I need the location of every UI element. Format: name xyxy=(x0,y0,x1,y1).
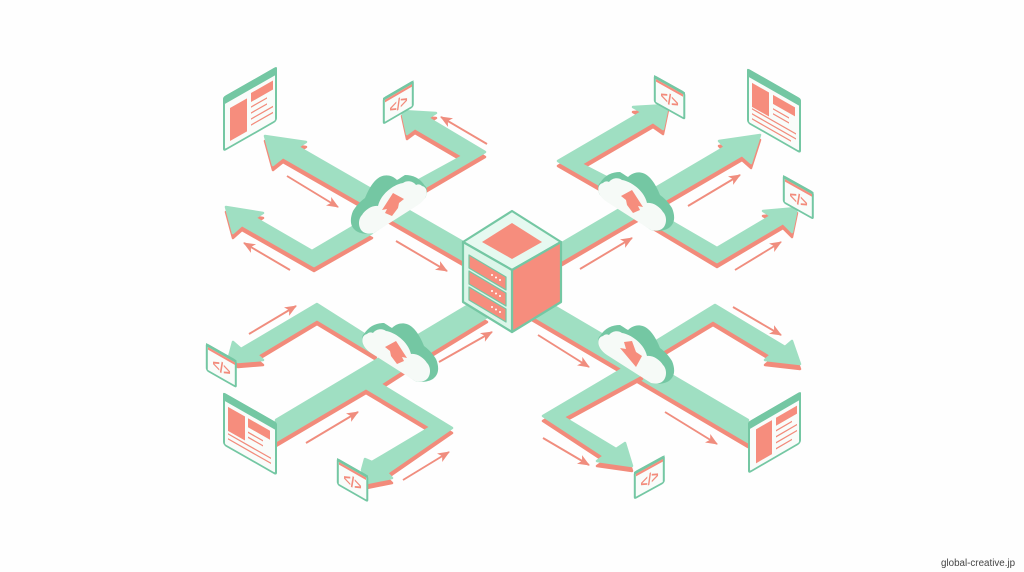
server left face with drive bays xyxy=(463,242,512,332)
web page window: top-right large xyxy=(747,68,801,153)
arrow: top-right to upper code window xyxy=(558,105,668,197)
code window: bottom-centre-left: </> xyxy=(343,469,362,497)
code window: top-right upper: </> xyxy=(660,86,679,114)
code window: top-right upper xyxy=(654,75,685,119)
cloud: top-left with up arrow xyxy=(351,175,427,234)
code window: top-right lower: </> xyxy=(789,186,808,214)
arrow: top-left to large page xyxy=(265,136,463,265)
arrow: bottom-right upper branch xyxy=(645,305,800,369)
code window: top-left small xyxy=(383,80,414,124)
arrow: top-left lower branch xyxy=(226,207,372,271)
arrow: bottom-right to large page xyxy=(520,292,748,447)
arrow: top-left to small code window xyxy=(402,111,485,198)
cloud: bottom-right with down arrow xyxy=(598,325,674,384)
code window: bottom-left: </> xyxy=(212,354,231,382)
server top face xyxy=(463,211,561,270)
web page window: bottom-left large xyxy=(223,392,277,475)
code window: bottom-left xyxy=(206,343,236,387)
web page window: top-left large xyxy=(223,66,277,151)
arrow: bottom-right lower branch xyxy=(543,361,642,471)
code window: top-right lower xyxy=(783,175,814,219)
cloud: bottom-left with up arrow xyxy=(362,323,438,382)
server cube xyxy=(463,211,561,332)
direction arrows: thin salmon indicators xyxy=(244,117,781,480)
code window: top-left small: </> xyxy=(389,91,408,119)
code window: bottom-centre-left xyxy=(337,458,368,501)
server right face xyxy=(512,242,561,332)
arrow: top-right to large page xyxy=(562,135,760,265)
web page window: bottom-right large xyxy=(748,391,801,473)
arrow: bottom-left main trunk with branch to lower code window xyxy=(276,306,487,488)
code window: bottom-right: </> xyxy=(640,466,659,494)
code window: bottom-right xyxy=(634,455,664,499)
cloud: top-right with up arrow xyxy=(598,172,674,231)
arrow: top-right to lower code window xyxy=(650,208,797,267)
arrow: bottom-left to left code window xyxy=(229,304,380,367)
watermark: global-creative.jp xyxy=(941,558,1016,569)
